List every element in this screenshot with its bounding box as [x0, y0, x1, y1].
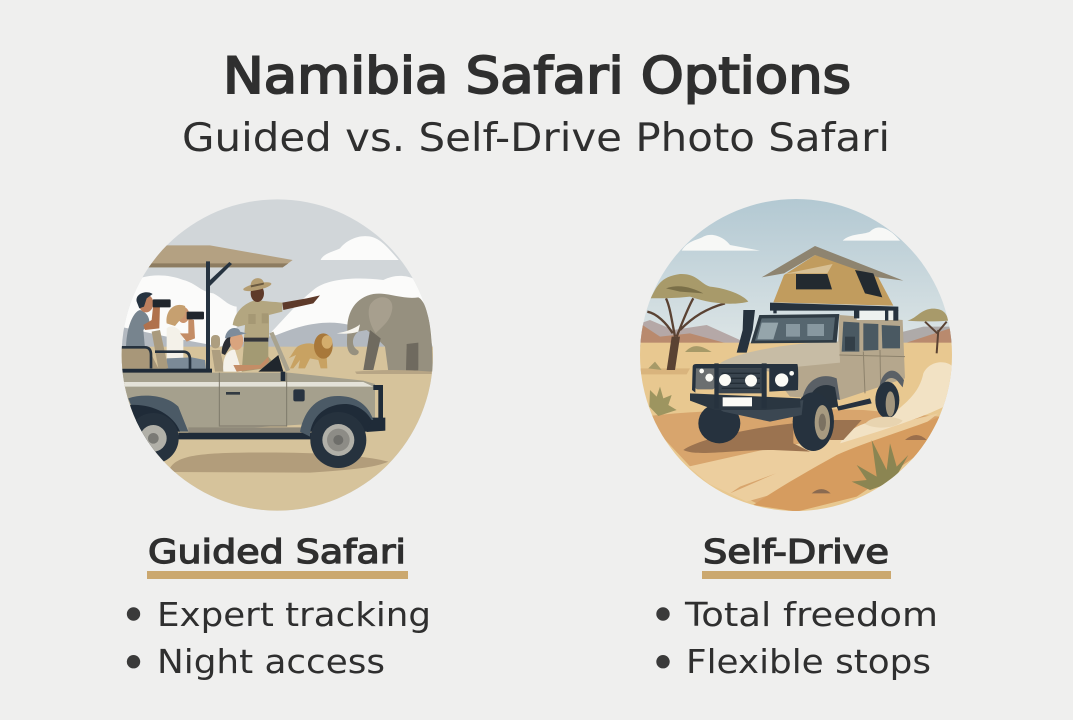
clouds — [120, 236, 437, 347]
photographer 2 — [166, 305, 206, 369]
grille — [718, 368, 763, 393]
sky — [644, 199, 950, 342]
rooftop tent — [762, 246, 903, 306]
front fender — [802, 376, 840, 402]
roof posts — [206, 261, 210, 370]
dust cloud — [840, 362, 953, 443]
photographer 1 — [126, 292, 171, 348]
left front tyre — [698, 403, 740, 443]
roof canopy — [148, 245, 293, 267]
guide — [233, 278, 320, 372]
list: guided safari: Expert tracking — [157, 595, 431, 634]
heading: self-drive: Self-Drive — [703, 532, 889, 571]
ground — [637, 343, 960, 516]
illustration: self-drive — [640, 199, 952, 511]
list: self-drive: Total freedom — [684, 595, 938, 634]
running board — [837, 398, 872, 411]
heading: guided safari: Guided Safari — [148, 532, 406, 571]
windshield frame — [269, 332, 290, 372]
lion — [286, 333, 333, 368]
vehicle shadow — [683, 423, 810, 453]
clouds — [682, 228, 900, 251]
snorkel — [737, 310, 755, 353]
list: guided safari — [127, 595, 431, 681]
side windows — [842, 322, 859, 352]
distant hills — [120, 323, 433, 350]
front right tyre — [793, 392, 834, 451]
illustration: guided safari — [122, 200, 433, 511]
body side — [766, 315, 905, 400]
elephant — [337, 294, 433, 374]
ground — [117, 347, 440, 513]
left acacia tree — [647, 274, 748, 370]
rear wheel arch — [128, 396, 188, 432]
driver — [222, 328, 283, 372]
front wheel — [310, 424, 366, 468]
mountains — [640, 320, 740, 347]
right acacia tree — [907, 309, 948, 353]
front wheel arch — [300, 396, 373, 437]
windshield — [751, 314, 839, 343]
lamp panels — [695, 367, 715, 389]
list: self-drive: Flexible stops — [686, 642, 931, 681]
back seats and rails — [121, 330, 225, 372]
bull bar — [714, 363, 767, 408]
gap behind rack — [857, 310, 893, 320]
roof rack — [770, 303, 898, 311]
title: Namibia Safari Options — [223, 47, 851, 105]
underline — [702, 571, 891, 579]
subtitle: Guided vs. Self-Drive Photo Safari — [182, 116, 890, 161]
rear wheel — [136, 420, 179, 462]
rear fender and tyre — [879, 371, 904, 387]
shrubs and rocks — [648, 346, 927, 493]
vehicle body — [120, 369, 385, 439]
headlights — [719, 374, 731, 386]
underline — [147, 571, 408, 579]
bumper — [715, 400, 803, 422]
vehicle — [683, 310, 905, 453]
list: self-drive — [656, 595, 938, 681]
list: guided safari: Night access — [157, 642, 385, 681]
